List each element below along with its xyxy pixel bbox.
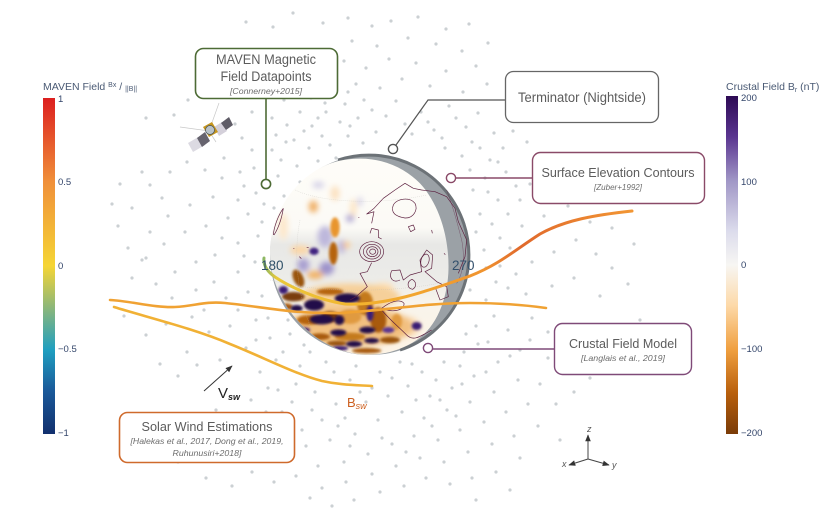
coordinate axes: z xyxy=(586,424,592,434)
colorbar: crustal field: −200 xyxy=(741,428,762,439)
callout: Solar Wind Estimations xyxy=(120,412,294,462)
longitude label 270: 270 xyxy=(452,258,475,273)
callout: Solar Wind Estimations: Ruhunusiri+2018] xyxy=(172,449,242,458)
colorbar: MAVEN field: 1 xyxy=(58,94,63,105)
callout: Terminator (Nightside): Terminator (Nightside) xyxy=(518,90,646,105)
colorbar: crustal field: 200 xyxy=(741,93,757,104)
orbit track: solar wind trajectory 3 xyxy=(114,307,372,386)
colorbar: MAVEN field: 0 xyxy=(58,261,63,272)
connector: Terminator box to globe xyxy=(388,100,505,154)
globe: nightside xyxy=(270,155,470,355)
colorbar: crustal field: 0 xyxy=(741,260,746,271)
globe: lit surface xyxy=(270,158,448,355)
arrow: solar wind velocity xyxy=(204,366,232,391)
callout: Terminator (Nightside) xyxy=(506,72,658,122)
longitude label 180: 180 xyxy=(261,258,284,273)
globe: crustal field anomalies, strong brown xyxy=(281,217,402,353)
icon: MAVEN spacecraft xyxy=(180,103,233,152)
callout: Solar Wind Estimations: Solar Wind Estimations xyxy=(142,420,272,434)
callout: Surface Elevation Contours: [Zuber+1992] xyxy=(593,183,643,192)
callout: Crustal Field Model: Crustal Field Model xyxy=(569,337,677,351)
callout: Solar Wind Estimations: [Halekas et al., 2017, Dong et al., 2019, xyxy=(129,437,284,446)
colorbar title: MAVEN field: Bx xyxy=(108,82,117,89)
label: B sw: B xyxy=(347,395,356,410)
scatter: MAVEN magnetic field datapoints xyxy=(112,13,640,506)
colorbar: MAVEN field: −0.5 xyxy=(58,344,77,355)
colorbar title: crustal field: r xyxy=(795,87,798,94)
colorbar: MAVEN field: −1 xyxy=(58,428,69,439)
callout: MAVEN Magnetic Field Datapoints: MAVEN Magnetic xyxy=(216,52,316,67)
callout: Crustal Field Model xyxy=(554,324,692,374)
colorbar title: MAVEN field: / xyxy=(116,81,125,93)
colorbar: MAVEN field xyxy=(43,81,137,439)
colorbar title: crustal field: Crustal Field B xyxy=(726,81,795,93)
callout: MAVEN Magnetic Field Datapoints: Field Datapoints xyxy=(220,69,312,84)
colorbar title: crustal field: (nT) xyxy=(797,81,819,93)
label: V sw: sw xyxy=(228,392,241,402)
globe: crustal field anomalies, soft xyxy=(279,182,420,347)
callout: Surface Elevation Contours xyxy=(532,152,704,204)
orbit track: solar wind trajectory 2 xyxy=(110,300,546,313)
colorbar: crustal field: −100 xyxy=(741,344,762,355)
orbit track: solar wind trajectory 1 xyxy=(264,211,632,304)
callout: Surface Elevation Contours: Surface Elevation Contours xyxy=(542,166,694,180)
globe: surface elevation contours xyxy=(273,183,467,338)
colorbar: MAVEN field: 0.5 xyxy=(58,177,71,188)
colorbar: crustal field: 100 xyxy=(741,177,757,188)
callout: MAVEN Magnetic Field Datapoints xyxy=(196,48,338,98)
coordinate axes xyxy=(561,424,617,470)
globe: graticule xyxy=(270,190,447,333)
connector: MAVEN box to point xyxy=(261,98,271,189)
connector: Crustal Field box to globe xyxy=(423,343,554,353)
label: V sw: V xyxy=(218,385,228,402)
globe: crustal field anomalies, strong purple xyxy=(279,248,422,351)
coordinate axes: x xyxy=(561,459,567,469)
coordinate axes: y xyxy=(611,460,617,470)
label: B sw: sw xyxy=(356,401,367,411)
callout: MAVEN Magnetic Field Datapoints: [Connerney+2015] xyxy=(229,87,303,96)
connector: Surface Elevation box to globe xyxy=(446,173,532,183)
globe: dark limb xyxy=(338,155,469,350)
globe: Mars with crustal field xyxy=(263,153,470,360)
colorbar title: MAVEN field: MAVEN Field xyxy=(43,81,105,93)
callout: Crustal Field Model: [Langlais et al., 2019] xyxy=(580,354,666,363)
colorbar: crustal field xyxy=(726,81,819,439)
colorbar title: MAVEN field: ||B|| xyxy=(125,86,137,93)
